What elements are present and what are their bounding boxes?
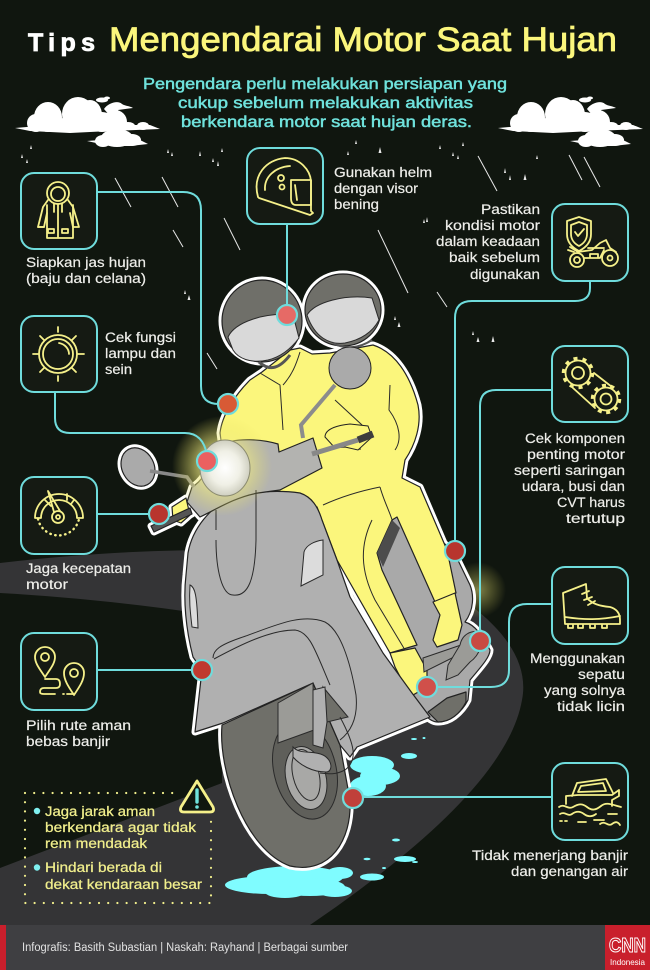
panel: kecepatan: motor: [26, 577, 69, 592]
icon: speedometer: [35, 491, 83, 535]
panel: helm: dengan visor: [334, 181, 419, 196]
panel: komponen: Cek komponen: [525, 431, 625, 446]
puddle: upper: [350, 756, 400, 796]
icon: warning triangle: [180, 781, 214, 812]
panel: kecepatan: [21, 477, 131, 592]
icon: helmet: [257, 158, 313, 215]
seat shadow: [377, 520, 400, 567]
icon: lamp: [33, 327, 84, 381]
callout: peringatan: dekat kendaraan besar: [45, 877, 203, 892]
panel: helm: Gunakan helm: [334, 165, 432, 180]
headlight: [200, 440, 250, 496]
panel: banjir: [472, 763, 629, 879]
cloud left: [15, 96, 160, 147]
panel: komponen: tertutup: [566, 511, 625, 526]
panel: jas hujan: [21, 173, 146, 286]
panel: rute: [21, 633, 131, 749]
callout: peringatan: [25, 781, 214, 903]
panel: banjir: dan genangan air: [511, 864, 629, 879]
panel: komponen: penting motor: [527, 447, 626, 462]
callout: peringatan: berkendara agar tidak: [45, 820, 196, 835]
panel: komponen: udara, busi dan: [522, 479, 625, 494]
puddle: front wheel: [225, 737, 426, 898]
icon: raincoat: [38, 182, 79, 238]
panel: sepatu: yang solnya: [544, 683, 626, 698]
footer: Infografis: Basith Subastian | Naskah: Rayhand | Berbagai sumber: [22, 942, 348, 954]
panel: komponen: [514, 346, 628, 526]
panel: sepatu: sepatu: [578, 667, 625, 682]
subtitle: [143, 76, 507, 131]
subtitle: Pengendara perlu melakukan persiapan yang: [143, 76, 507, 93]
panel: lampu: sein: [105, 362, 132, 377]
panel: sepatu: Menggunakan: [530, 651, 625, 666]
subtitle: berkendara motor saat hujan deras.: [181, 114, 472, 131]
panel: helm: [247, 148, 432, 224]
title: Tips: [28, 29, 95, 57]
panel: rute: bebas banjir: [26, 734, 111, 749]
panel: banjir: Tidak menerjang banjir: [472, 848, 629, 863]
road: [0, 550, 523, 925]
panel: kondisi motor: [436, 202, 628, 282]
mirror right: [301, 347, 371, 438]
panel: rute: Pilih rute aman: [26, 718, 131, 733]
fork and wheel hub: [263, 683, 353, 826]
logo: CNN Indonesia: Indonesia: [610, 957, 645, 967]
logo: CNN Indonesia: [605, 925, 650, 970]
panel: sepatu: tidak licin: [557, 699, 625, 714]
glow: rear light: [450, 562, 506, 618]
handle grip: [312, 434, 373, 454]
panel: lampu: lampu dan: [105, 346, 176, 361]
subtitle: cukup sebelum melakukan aktivitas: [178, 95, 473, 112]
panel: kondisi motor: baik sebelum: [449, 250, 540, 265]
icon: car in flood: [559, 779, 621, 825]
cloud right: [498, 96, 643, 147]
headlight glow: [172, 416, 272, 516]
icon: gears: [564, 358, 620, 412]
panel: kondisi motor: Pastikan: [481, 202, 540, 217]
mirror left stem: [150, 471, 194, 487]
panel: kondisi motor: kondisi motor: [445, 218, 541, 233]
helmet visors: [228, 297, 379, 361]
panel: lampu: [21, 316, 176, 392]
rain: [21, 140, 600, 369]
panel: komponen: CVT harus: [557, 495, 625, 510]
icon: route pins: [35, 647, 84, 695]
callout: peringatan: Jaga jarak aman: [45, 804, 155, 819]
bodywork lines: [213, 490, 356, 740]
body vents: [190, 540, 323, 628]
callout: peringatan: Hindari berada di: [45, 860, 162, 875]
right hand: [325, 424, 372, 450]
panel: kondisi motor: digunakan: [470, 267, 540, 282]
icon: boot: [563, 584, 620, 628]
neck and shoulders details: [259, 340, 405, 650]
panel: jas hujan: Siapkan jas hujan: [26, 255, 146, 270]
connectors: [55, 192, 590, 797]
scooter with riders: [114, 274, 490, 867]
foot deck: [423, 632, 482, 680]
panel: kecepatan: Jaga kecepatan: [26, 561, 131, 576]
panel: helm: bening: [334, 197, 379, 212]
panel: lampu: Cek fungsi: [105, 330, 176, 345]
icon: shield and motorbike: [567, 217, 618, 267]
marker dots: [149, 305, 490, 808]
title: Mengendarai Motor Saat Hujan: [109, 21, 617, 59]
footer: [0, 925, 650, 970]
callout: peringatan: rem mendadak: [45, 836, 147, 851]
panel: jas hujan: (baju dan celana): [26, 271, 146, 286]
panel: kondisi motor: dalam keadaan: [436, 234, 540, 249]
panel: komponen: seperti saringan: [514, 463, 625, 478]
panel: sepatu: [530, 567, 628, 714]
